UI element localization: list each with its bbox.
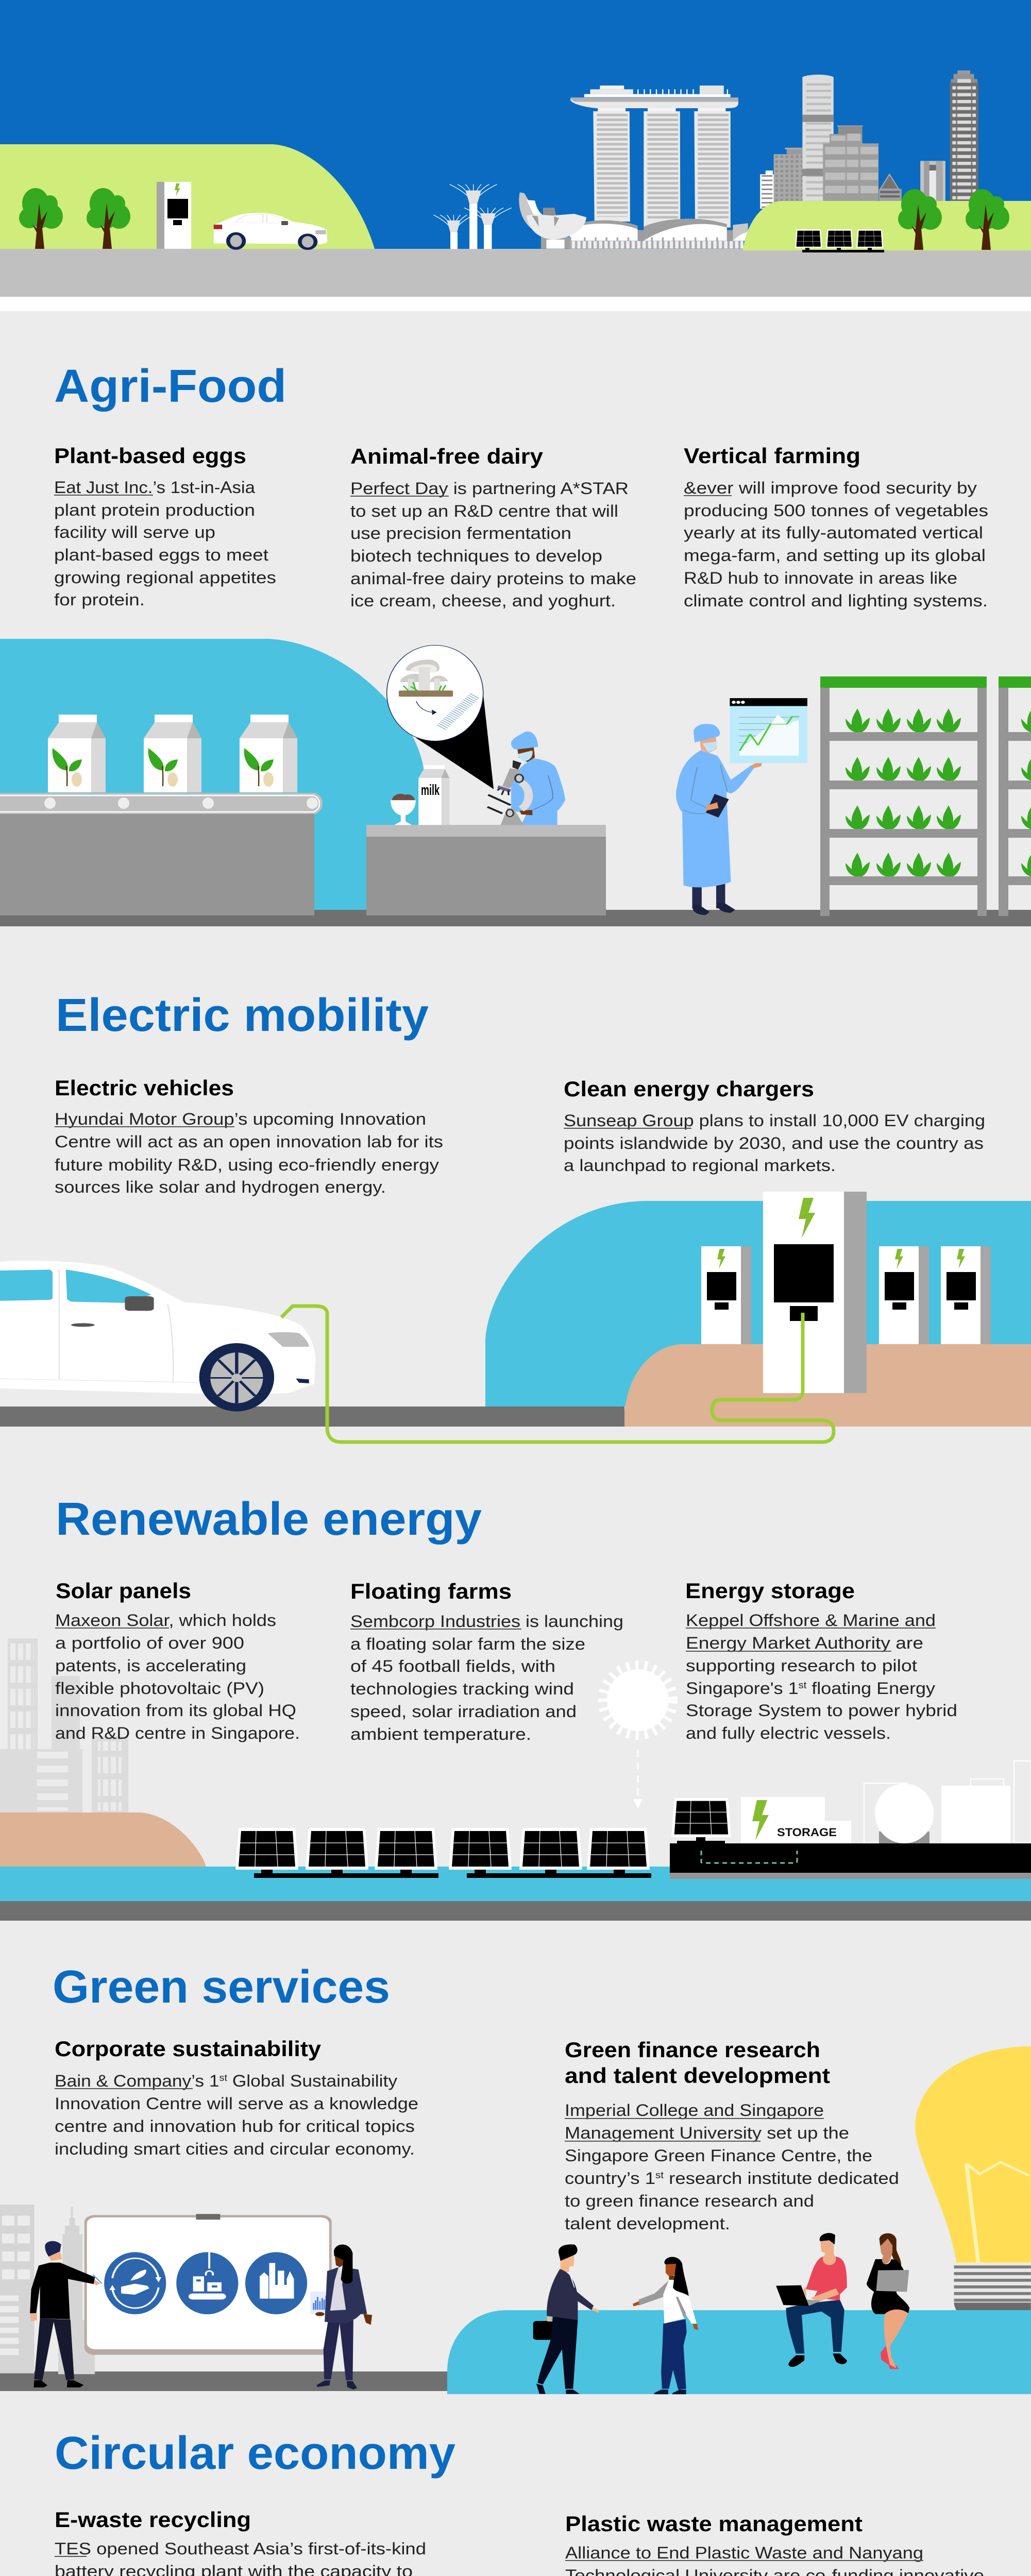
cyan platform: [447, 2310, 1031, 2394]
text block: energy storage: Keppel Offshore & Marine and: [686, 1611, 936, 1630]
domes and fence: [541, 218, 748, 249]
text block: solar panels: [55, 1579, 300, 1742]
cyan hill backdrop: [0, 639, 424, 910]
text block: plant-based eggs: [54, 444, 276, 609]
icon: city circle: [245, 2252, 307, 2314]
presenter man: [30, 2241, 102, 2387]
text block: corporate sustainability: including smart cities and circular economy.: [55, 2140, 415, 2158]
icon: factory circle: [176, 2252, 238, 2314]
finance scene: people: [533, 2233, 909, 2394]
small chargers: [701, 1246, 991, 1344]
text block: corporate sustainability: [55, 2037, 418, 2158]
road: [0, 1901, 1031, 1921]
text block: clean energy chargers: points islandwide by 2030, and use the country as: [564, 1134, 984, 1153]
text block: plant-based eggs: facility will serve up: [54, 523, 215, 541]
text block: electric vehicles: Hyundai Motor Group’s upcoming Innovation: [55, 1110, 426, 1128]
heading: Electric mobility: Electric mobility: [56, 990, 429, 1041]
text block: plastic waste management: Alliance to End Plastic Waste and Nanyang: [565, 2544, 923, 2562]
floor strip: [0, 910, 1031, 926]
white divider band: [0, 297, 1031, 311]
scientist with tablet: [676, 724, 766, 915]
scientist at microscope: [511, 732, 565, 825]
tan shore: [0, 1812, 206, 1867]
text block: clean energy chargers: Clean energy chargers: [564, 1077, 814, 1101]
conveyor with cartons: [0, 715, 323, 916]
charging cable: [281, 1306, 834, 1442]
text block: energy storage: Energy Market Authority are: [686, 1634, 923, 1652]
left green hill: [0, 144, 375, 249]
panel: header skyline: [0, 0, 1031, 311]
text block: electric vehicles: [55, 1076, 443, 1196]
text block: green finance: [565, 2038, 899, 2233]
text block: solar panels: flexible photovoltaic (PV): [55, 1679, 264, 1698]
light bulb: [915, 2046, 1031, 2317]
microscope: [487, 760, 529, 825]
text block: solar panels: and R&D centre in Singapore.: [55, 1724, 300, 1742]
text block: plant-based eggs: Eat Just Inc.’s 1st-in-Asia: [54, 478, 255, 497]
text block: floating farms: a floating solar farm the size: [350, 1635, 585, 1653]
text block: solar panels: Solar panels: [56, 1579, 191, 1603]
lab table: [366, 825, 606, 916]
icon: white car: [214, 213, 327, 250]
text block: plastic waste management: [565, 2512, 984, 2576]
dark tower: [950, 71, 978, 202]
text block: plastic waste management: Plastic waste management: [565, 2512, 863, 2536]
text block: green finance: talent development.: [565, 2214, 730, 2233]
text block: green finance: Singapore Green Finance Centre, the: [565, 2146, 872, 2165]
text block: electric vehicles: future mobility R&D, using eco-friendly energy: [55, 1156, 439, 1174]
icon: EV charging station: [157, 182, 191, 249]
text block: electric vehicles: Centre will act as an open innovation lab for its: [55, 1132, 443, 1151]
lab scene: bubble, milk, scientists: [387, 645, 766, 915]
milk label: milk: [421, 782, 440, 799]
presentation scene: [0, 2205, 372, 2389]
text block: vertical farming: Vertical farming: [684, 444, 860, 468]
text block: plant-based eggs: for protein.: [54, 590, 145, 609]
text block: corporate sustainability: Global Sustainability: [227, 2072, 397, 2090]
white low tower: [760, 171, 774, 209]
text block: green finance: Imperial College and Singapore: [565, 2101, 824, 2120]
panel: Electric mobility: [0, 990, 1031, 1442]
text block: energy storage: [685, 1579, 957, 1742]
floating solar panels: [235, 1828, 651, 1878]
skyline buildings and Marina Bay Sands: [519, 71, 978, 249]
icon: sustainability circle: [104, 2252, 166, 2314]
text block: clean energy chargers: Sunseap Group plans to install 10,000 EV charging: [564, 1111, 985, 1130]
cyan hill backdrop: [485, 1201, 1031, 1406]
whiteboard: [84, 2214, 332, 2355]
text block: floating farms: speed, solar irradiation and: [350, 1702, 577, 1721]
text block: vertical farming: mega-farm, and setting up its global: [684, 546, 986, 565]
text block: corporate sustainability: Bain & Company’s 1: [55, 2072, 204, 2090]
text block: green finance: and talent development: [565, 2063, 830, 2088]
text block: solar panels: patents, is accelerating: [55, 1656, 246, 1675]
ground strip: [0, 249, 1031, 297]
left grey building: [774, 148, 802, 202]
ArtScience lotus: [519, 192, 586, 249]
text block: green finance: Management University set up the: [565, 2124, 849, 2142]
text block: solar panels: Maxeon Solar, which holds: [55, 1611, 276, 1630]
text block: corporate sustainability: st: [219, 2073, 227, 2083]
grey block building: [823, 125, 878, 202]
milk carton: [418, 765, 449, 825]
text block: animal-free dairy: Animal-free dairy: [350, 444, 544, 468]
Marina Bay Sands towers: [570, 86, 738, 228]
trees left: [19, 188, 130, 249]
dashed sun ray arrow: [633, 1750, 643, 1809]
text block: energy storage: Singapore's 1: [686, 1679, 786, 1698]
text block: animal-free dairy: [350, 444, 636, 610]
big charger: [763, 1192, 867, 1393]
text block: vertical farming: producing 500 tonnes of vegetables: [684, 501, 988, 520]
text block: corporate sustainability: centre and innovation hub for critical topics: [55, 2117, 415, 2136]
text block: green finance: research institute dedicated: [664, 2169, 899, 2188]
text block: electric vehicles: sources like solar and hydrogen energy.: [55, 1178, 386, 1196]
text block: solar panels: a portfolio of over 900: [55, 1634, 244, 1652]
text block: floating farms: Floating farms: [350, 1579, 512, 1603]
text block: energy storage: st: [799, 1680, 806, 1690]
road: [0, 2371, 447, 2391]
text block: animal-free dairy: biotech techniques to develop: [350, 547, 602, 565]
woman greeting: [633, 2257, 698, 2394]
text block: vertical farming: &ever will improve food security by: [684, 479, 977, 497]
right green hill: [743, 201, 1031, 250]
text block: corporate sustainability: Corporate sustainability: [55, 2037, 322, 2061]
text block: vertical farming: yearly at its fully-automated vertical: [684, 523, 983, 542]
man with laptop: [776, 2233, 847, 2367]
trees right: [898, 189, 1009, 250]
white car: [0, 1261, 315, 1412]
text block: floating farms: of 45 football fields, with: [350, 1657, 555, 1675]
panel: Agri-Food: [0, 361, 1031, 926]
heading: Renewable energy: Renewable energy: [56, 1494, 482, 1545]
text block: plant-based eggs: plant-based eggs to meet: [54, 546, 268, 564]
panel: Circular economy: [0, 2428, 1031, 2576]
text block: animal-free dairy: Perfect Day is partnering A*STAR: [350, 479, 629, 498]
text block: vertical farming: R&D hub to innovate in areas like: [684, 569, 957, 587]
text block: plant-based eggs: Plant-based eggs: [54, 444, 246, 468]
data screen with chart: [730, 698, 807, 763]
water: [0, 1867, 1031, 1901]
slim striped tower: [920, 161, 945, 202]
heading: Agri-Food: Agri-Food: [54, 361, 286, 412]
text block: solar panels: innovation from its global HQ: [55, 1701, 296, 1720]
text block: animal-free dairy: to set up an R&D centre that will: [350, 502, 618, 520]
text block: plant-based eggs: growing regional appetites: [54, 568, 276, 587]
road: [0, 1406, 624, 1427]
text block: green finance: to green finance research and: [565, 2192, 814, 2210]
text block: e-waste recycling: E-waste recycling: [55, 2507, 251, 2532]
steeple building: [879, 174, 902, 202]
text block: floating farms: Sembcorp Industries is launching: [350, 1612, 623, 1631]
text block: floating farms: ambient temperature.: [350, 1725, 531, 1743]
text block: e-waste recycling: [55, 2507, 447, 2576]
text block: energy storage: Energy storage: [685, 1579, 855, 1603]
heading: Circular economy: Circular economy: [55, 2428, 455, 2479]
grey skyline backdrop: [0, 1638, 128, 1814]
heading: Green services: Green services: [53, 1961, 390, 2013]
panel: Renewable energy: [0, 1494, 1031, 1921]
icon: supertrees: [433, 184, 512, 249]
grey skyline backdrop: [0, 2205, 95, 2374]
text block: e-waste recycling: TES opened Southeast Asia’s first-of-its-kind: [55, 2539, 426, 2558]
sky: [0, 0, 1031, 249]
text block: clean energy chargers: [564, 1077, 985, 1175]
magnifier bubble with mushrooms and DNA: [387, 645, 483, 741]
text block: plant-based eggs: plant protein production: [54, 501, 255, 519]
text block: electric vehicles: Electric vehicles: [55, 1076, 234, 1100]
text block: animal-free dairy: ice cream, cheese, and yoghurt.: [350, 591, 616, 610]
text block: clean energy chargers: a launchpad to regional markets.: [564, 1156, 836, 1175]
presenter woman: [310, 2245, 372, 2389]
text block: green finance: country’s 1: [565, 2169, 644, 2188]
tan ground hill: [624, 1344, 1031, 1427]
ice cream glass: [391, 794, 416, 825]
text block: floating farms: technologies tracking wind: [350, 1680, 574, 1698]
text block: green finance: Green finance research: [565, 2038, 820, 2062]
energy storage vessel: [670, 1761, 1031, 1879]
text block: animal-free dairy: use precision fermentation: [350, 524, 571, 543]
text block: energy storage: Storage System to power hybrid: [686, 1701, 957, 1720]
text block: energy storage: and fully electric vessels.: [686, 1724, 891, 1742]
man with briefcase: [533, 2244, 599, 2394]
text block: vertical farming: climate control and lighting systems.: [684, 591, 988, 610]
tall light tower: [802, 75, 834, 202]
magnifier cone: [416, 693, 494, 789]
vertical farm racks: [820, 676, 1031, 916]
solar panels in header: [795, 229, 884, 252]
woman with laptop: [867, 2233, 909, 2369]
text block: energy storage: supporting research to pilot: [686, 1656, 917, 1675]
text block: floating farms: [350, 1579, 623, 1743]
text block: animal-free dairy: animal-free dairy proteins to make: [350, 569, 636, 588]
energy storage vessel: STORAGE: [777, 1826, 837, 1839]
panel: Green services: [0, 1961, 1031, 2394]
text block: vertical farming: [684, 444, 988, 610]
text block: energy storage: floating Energy: [806, 1679, 935, 1698]
icon: sun: [604, 1666, 672, 1734]
text block: corporate sustainability: Innovation Centre will serve as a knowledge: [55, 2094, 418, 2113]
text block: green finance: st: [655, 2170, 664, 2180]
